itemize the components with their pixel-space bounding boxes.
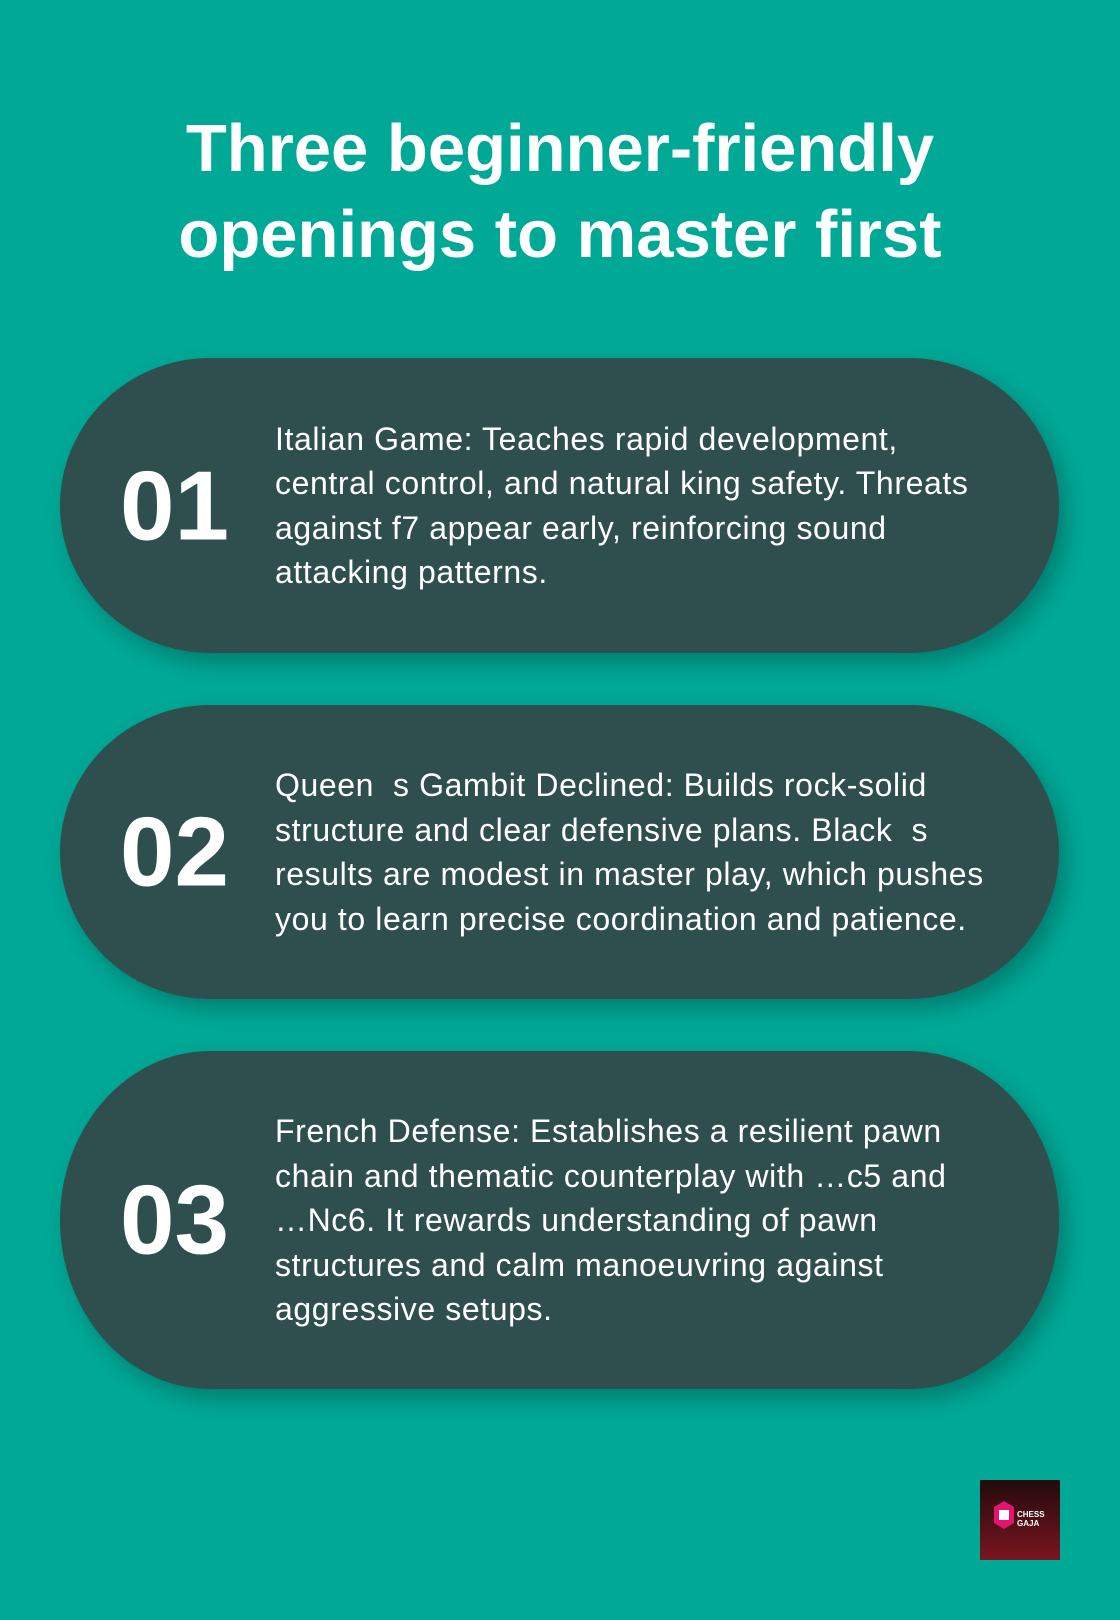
text: Italian Game: central control, and natural king safety. Threats [275, 465, 968, 501]
logo: Chess Gaja: CHESS [1017, 1510, 1045, 1519]
title: openings to master first [178, 197, 942, 272]
text: French Defense [275, 1113, 947, 1327]
panel: 03 French Defense [60, 1051, 1059, 1389]
text: Italian Game [275, 420, 968, 590]
text: Italian Game: Italian Game: Teaches rapid development, [275, 420, 898, 456]
number 02: 02 [120, 796, 229, 906]
title [178, 111, 942, 272]
title: Three beginner-friendly [186, 111, 934, 186]
logo: Chess Gaja: GAJA [1017, 1519, 1039, 1528]
logo: Chess Gaja [980, 1480, 1060, 1560]
text: French Defense: …Nc6. It rewards understanding of pawn [275, 1202, 878, 1238]
panel: 01 Italian Game [60, 358, 1059, 653]
text: French Defense: French Defense: Establishes a resilient pawn [275, 1113, 942, 1149]
text: Queen's Gambit Declined: results are modest in master play, which pushes [275, 856, 984, 892]
text: Italian Game: attacking patterns. [275, 554, 548, 590]
number 01: 01 [120, 450, 229, 560]
panel: 02 Queen's Gambit Declined [60, 705, 1059, 999]
text: Italian Game: against f7 appear early, reinforcing sound [275, 510, 887, 546]
text: Queen's Gambit Declined: Queen s Gambit Declined: Builds rock-solid [275, 767, 927, 803]
text: French Defense: chain and thematic counterplay with …c5 and [275, 1157, 947, 1193]
text: Queen's Gambit Declined: structure and clear defensive plans. Black s [275, 812, 928, 848]
text: French Defense: structures and calm manoeuvring against [275, 1246, 884, 1282]
text: French Defense: aggressive setups. [275, 1291, 553, 1327]
text: Queen's Gambit Declined [275, 767, 984, 936]
number 03: 03 [120, 1164, 229, 1274]
text: Queen's Gambit Declined: you to learn precise coordination and patience. [275, 900, 967, 936]
